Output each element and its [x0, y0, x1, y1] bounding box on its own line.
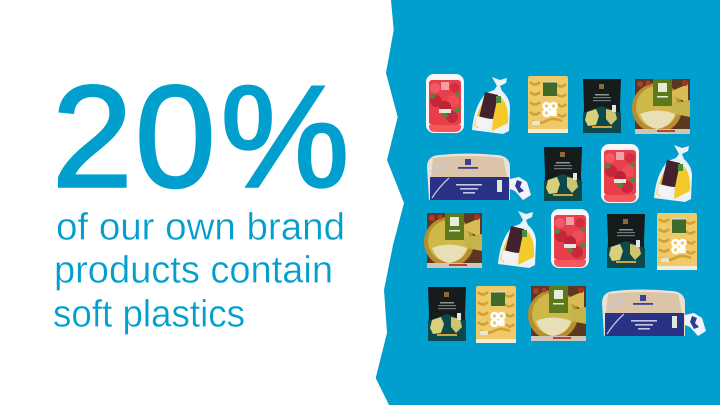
line: products contain: products contain — [54, 250, 333, 292]
product: dark snack bag, row 3 — [607, 214, 645, 268]
product: pasta, row 1 — [528, 76, 568, 133]
product: pizza, row 1 — [632, 79, 690, 134]
product: pizza, row 4 — [528, 286, 586, 341]
product: pizza, row 3 — [424, 213, 482, 268]
product: bananas, row 2 — [654, 145, 692, 202]
product: pasta, row 4 — [476, 286, 516, 343]
headline: 20%: 20% — [52, 56, 349, 218]
blue panel with torn edge — [376, 0, 720, 405]
product: bananas, row 3 — [498, 211, 536, 268]
product: dark snack bag, row 4 — [428, 287, 466, 341]
product: pasta, row 3 — [657, 213, 697, 270]
product: dark snack bag, row 2 — [544, 147, 582, 201]
product: strawberries, row 2 — [601, 144, 639, 203]
product grid — [424, 74, 706, 343]
product: dark snack bag, row 1 — [583, 79, 621, 133]
line: soft plastics: soft plastics — [53, 294, 245, 336]
product: bread loaf, row 2 — [427, 154, 531, 200]
product: bananas, row 1 — [472, 77, 510, 134]
product: strawberries, row 3 — [551, 209, 589, 268]
line: of our own brand: of our own brand — [56, 206, 345, 248]
product: strawberries, row 1 — [426, 74, 464, 133]
product: bread loaf, row 4 — [602, 290, 706, 336]
statement text — [53, 206, 345, 336]
